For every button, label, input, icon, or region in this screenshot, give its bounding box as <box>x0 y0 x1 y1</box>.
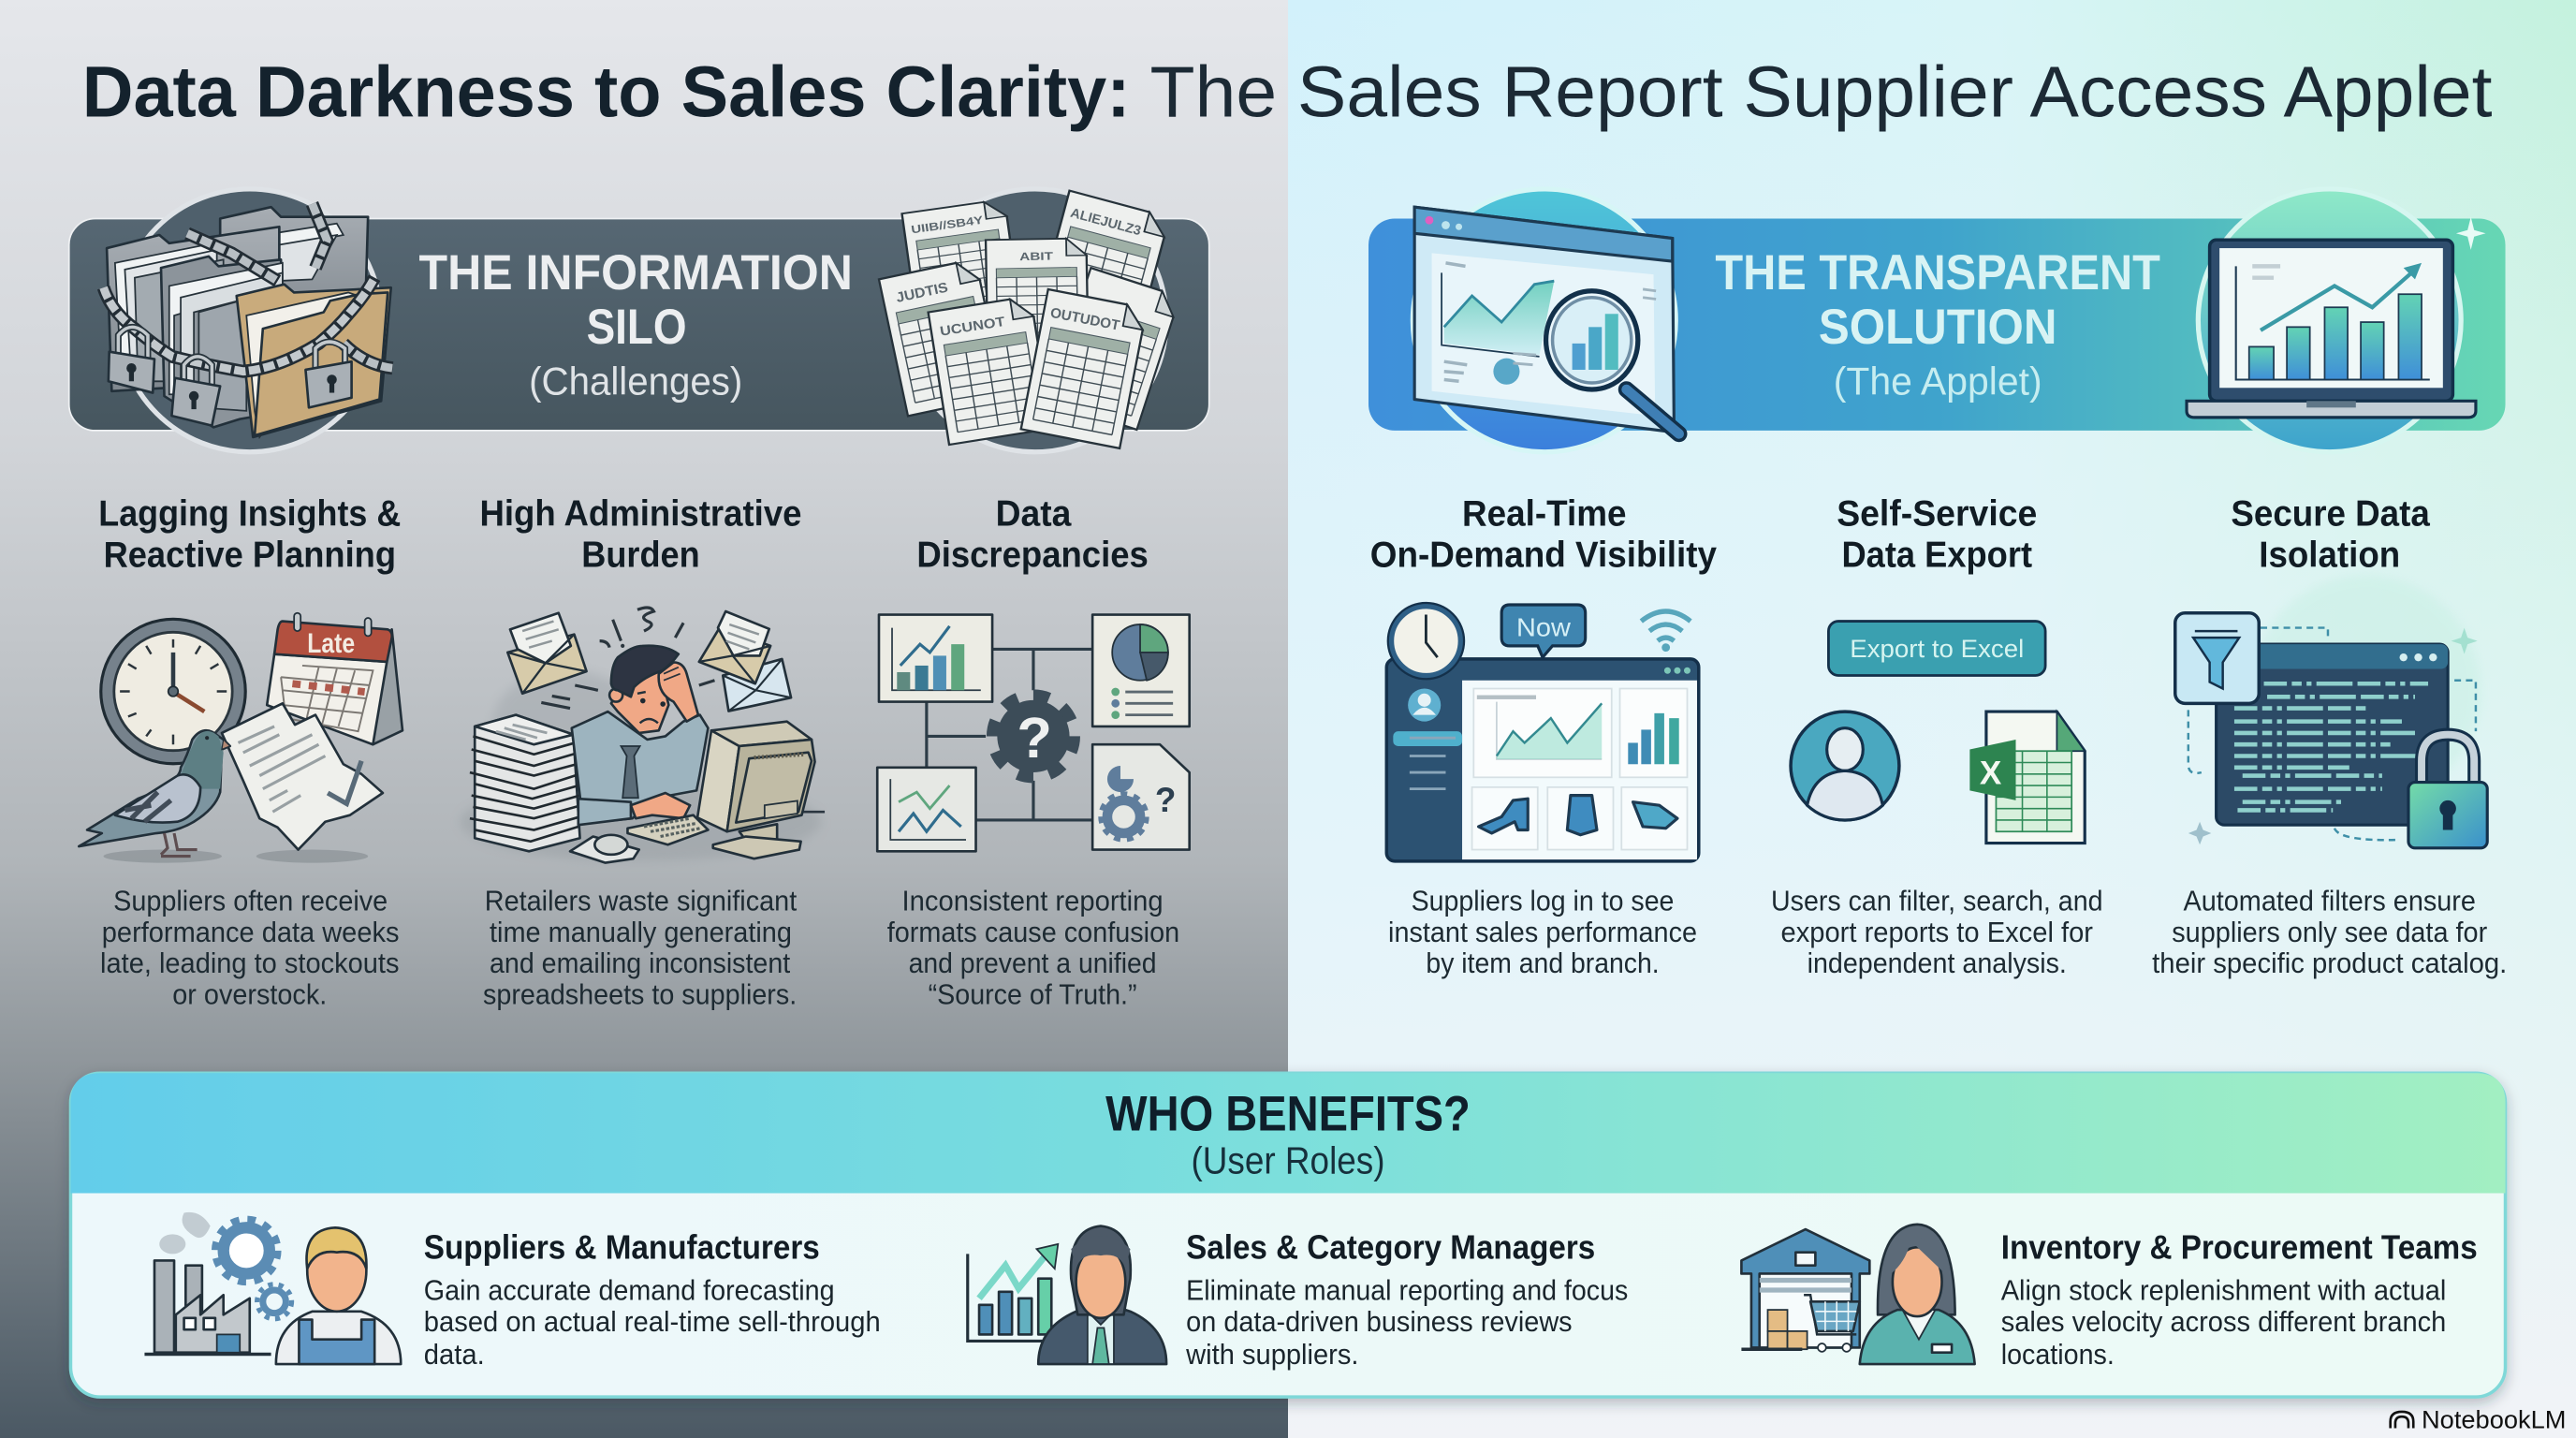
text: sales and category managers <box>1185 1228 1628 1371</box>
panel: information silo banner <box>69 189 1209 452</box>
text: inventory and procurement teams: sales velocity across different branch <box>2001 1305 2446 1338</box>
text: sales and category managers: with suppliers. <box>1185 1338 1358 1371</box>
icon: live dashboard <box>1386 603 1699 861</box>
text: suppliers and manufacturers: Gain accurate demand forecasting <box>424 1274 835 1307</box>
text: self-service description: Users can filter, search, and <box>1771 885 2103 917</box>
text: secure isolation description: their specific product catalog. <box>2152 946 2507 979</box>
icon: inconsistent spreadsheets: UIIB//SB4Y <box>910 213 985 236</box>
heading: self-service export: Data Export <box>1841 536 2032 576</box>
role: inventory and procurement teams <box>1741 1225 2478 1371</box>
heading: real-time visibility: Real-Time <box>1462 494 1627 535</box>
heading: who benefits: (User Roles) <box>1191 1138 1385 1181</box>
heading: administrative burden <box>479 494 801 576</box>
icon: clock, calendar and pigeon <box>79 613 402 863</box>
button: export to excel: Export to Excel <box>1850 634 2024 663</box>
background: right light half <box>1288 0 2576 1438</box>
heading: data discrepancies: Discrepancies <box>916 536 1149 576</box>
icon: clock, calendar and pigeon: Late <box>307 628 355 659</box>
text: suppliers and manufacturers: based on actual real-time sell-through <box>424 1305 881 1338</box>
icon: mismatched reports around a gear <box>877 615 1190 851</box>
text: lagging insights description: or overstock. <box>172 978 327 1011</box>
text: suppliers and manufacturers: data. <box>424 1338 485 1371</box>
heading: lagging insights: Reactive Planning <box>104 536 396 576</box>
text: sales and category managers: Sales & Category Managers <box>1186 1228 1595 1267</box>
heading: secure data isolation: Isolation <box>2259 536 2400 576</box>
heading: the transparent solution: SOLUTION <box>1819 300 2056 355</box>
text: data discrepancies description: formats cause confusion <box>887 916 1179 948</box>
text: data discrepancies description: “Source of Truth.” <box>929 978 1137 1011</box>
icon: warehouse and team member <box>1741 1225 1975 1364</box>
heading: administrative burden: High Administrative <box>479 494 801 535</box>
text: suppliers and manufacturers <box>424 1228 881 1371</box>
icon: excel sheet: X <box>1980 755 2002 791</box>
text: lagging insights description <box>100 885 399 1011</box>
heading: the information silo: (Challenges) <box>529 359 742 403</box>
text: secure isolation description <box>2152 885 2507 979</box>
heading: lagging insights <box>98 494 401 576</box>
heading: self-service export <box>1837 494 2037 576</box>
heading: the transparent solution: (The Applet) <box>1834 359 2042 403</box>
column: real-time visibility <box>1370 494 1718 979</box>
column: self-service export <box>1771 494 2103 979</box>
icon: inconsistent spreadsheets <box>879 191 1180 448</box>
icon: excel sheet <box>1969 712 2085 844</box>
icon: inconsistent spreadsheets: UCUNOT <box>939 315 1006 339</box>
icon: flying envelopes <box>507 611 791 712</box>
heading: the transparent solution <box>1715 245 2160 403</box>
heading: secure data isolation: Secure Data <box>2231 494 2430 535</box>
heading: lagging insights: Lagging Insights & <box>98 494 401 535</box>
icon: inconsistent spreadsheets: JUDTIS <box>895 281 949 306</box>
heading: data discrepancies: Data <box>996 494 1072 535</box>
icon: manager and chart <box>968 1226 1166 1364</box>
heading: the information silo: THE INFORMATION <box>419 245 853 301</box>
text: self-service description <box>1771 885 2103 979</box>
heading: the information silo <box>419 245 853 403</box>
background: left dark half <box>0 0 1288 1438</box>
text: data discrepancies description: and prevent a unified <box>909 946 1157 979</box>
icon: live dashboard: Now <box>1516 612 1572 641</box>
icon: padlocks <box>109 327 352 426</box>
text: real-time description: Suppliers log in to see <box>1412 885 1674 917</box>
text: administrative burden description <box>483 885 798 1011</box>
column: administrative burden <box>460 494 825 1011</box>
heading: secure data isolation <box>2231 494 2430 576</box>
text: administrative burden description: spreadsheets to suppliers. <box>483 978 797 1011</box>
text: self-service description: export reports to Excel for <box>1781 916 2093 948</box>
panel: who benefits <box>70 1073 2506 1397</box>
heading: the transparent solution: THE TRANSPARENT <box>1715 245 2160 301</box>
icon: laptop with rising chart <box>2187 217 2485 418</box>
logo: notebooklm: NotebookLM <box>2422 1404 2566 1433</box>
text: real-time description <box>1388 885 1697 979</box>
icon: browser with magnifier <box>1414 207 1679 433</box>
heading: who benefits <box>1105 1087 1471 1181</box>
column: secure data isolation <box>2152 494 2507 979</box>
title: Data Darkness to Sales Clarity: <box>82 52 1131 133</box>
text: lagging insights description: late, leading to stockouts <box>100 946 399 979</box>
icon: filtered code window and lock <box>2175 575 2487 848</box>
text: administrative burden description: Retailers waste significant <box>485 885 798 917</box>
text: inventory and procurement teams: locations. <box>2001 1338 2115 1371</box>
icon: inconsistent spreadsheets: OUTUDOT <box>1049 305 1121 334</box>
heading: administrative burden: Burden <box>581 536 700 576</box>
icon: mismatched reports around a gear: ? <box>1155 781 1176 819</box>
text: self-service description: independent analysis. <box>1808 946 2067 979</box>
panel: transparent solution banner <box>1368 189 2506 452</box>
icon: chained folders <box>104 204 392 437</box>
text: data discrepancies description <box>887 885 1179 1011</box>
icon: paper stack <box>470 715 581 851</box>
text: lagging insights description: performance data weeks <box>102 916 399 948</box>
title <box>82 52 2492 133</box>
text: inventory and procurement teams <box>2001 1228 2478 1371</box>
heading: real-time visibility: On-Demand Visibility <box>1370 536 1718 576</box>
heading: data discrepancies <box>916 494 1149 576</box>
heading: self-service export: Self-Service <box>1837 494 2037 535</box>
text: sales and category managers: on data-driven business reviews <box>1186 1305 1573 1338</box>
column: lagging insights <box>79 494 402 1011</box>
icon: overwhelmed worker <box>460 608 825 863</box>
icon: inconsistent spreadsheets: ABIT <box>1019 250 1054 263</box>
text: inventory and procurement teams: Align stock replenishment with actual <box>2001 1274 2446 1307</box>
text: inventory and procurement teams: Inventory & Procurement Teams <box>2001 1228 2478 1267</box>
icon: inconsistent spreadsheets: ALIEJULZ3 <box>1069 205 1143 239</box>
text: administrative burden description: time manually generating <box>490 916 792 948</box>
heading: the information silo: SILO <box>587 300 687 355</box>
icon: mismatched reports around a gear: ? <box>1017 706 1052 770</box>
role: sales and category managers <box>968 1226 1628 1371</box>
text: suppliers and manufacturers: Suppliers & Manufacturers <box>424 1228 820 1267</box>
button: export to excel <box>1828 622 2045 675</box>
column: data discrepancies <box>877 494 1190 1011</box>
text: administrative burden description: and emailing inconsistent <box>490 946 791 979</box>
icon: factory and worker <box>144 1212 401 1364</box>
icon: beige monitor <box>697 722 825 858</box>
text: secure isolation description: Automated filters ensure <box>2184 885 2476 917</box>
heading: who benefits: WHO BENEFITS? <box>1105 1087 1471 1142</box>
text: real-time description: by item and branch. <box>1426 946 1660 979</box>
text: sales and category managers: Eliminate manual reporting and focus <box>1186 1274 1628 1307</box>
text: data discrepancies description: Inconsistent reporting <box>902 885 1164 917</box>
role: suppliers and manufacturers <box>144 1212 881 1371</box>
title: The Sales Report Supplier Access Applet <box>1150 52 2492 133</box>
icon: user avatar <box>1791 712 1899 820</box>
text: secure isolation description: suppliers only see data for <box>2172 916 2487 948</box>
text: real-time description: instant sales performance <box>1388 916 1697 948</box>
text: lagging insights description: Suppliers often receive <box>113 885 388 917</box>
heading: real-time visibility <box>1370 494 1718 576</box>
